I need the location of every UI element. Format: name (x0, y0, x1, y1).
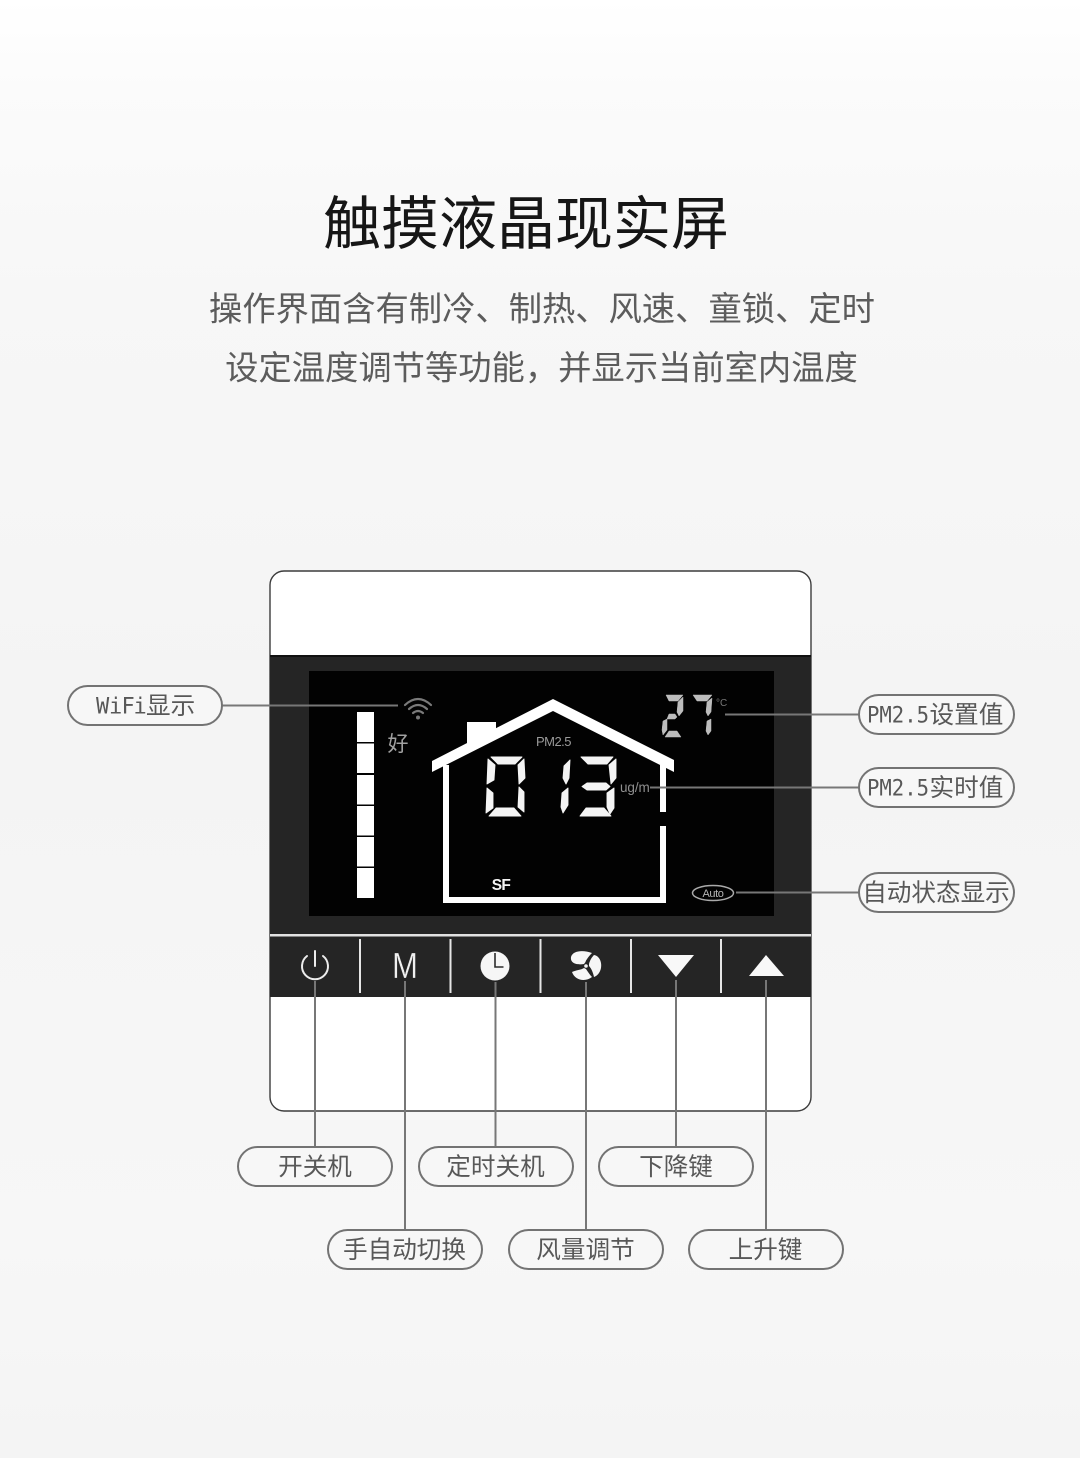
leader line: mode (404, 981, 406, 1230)
callout: timer off (419, 1147, 573, 1186)
callout: fan speed (509, 1230, 663, 1269)
leader line: fan (585, 982, 587, 1230)
icon: fan (571, 951, 601, 980)
callout: up key (689, 1230, 843, 1269)
subtitle text block: 操作界面含有制冷、制热、风速、童锁、定时 (209, 292, 875, 328)
PM2.5 caption: PM2.5 (536, 734, 571, 749)
icon: timer clock (480, 952, 510, 980)
leader line: timer (494, 982, 496, 1147)
icon: house outline (432, 699, 674, 903)
icon: up arrow (749, 955, 784, 976)
panel: LCD screen (309, 671, 774, 916)
leader line: down (675, 980, 677, 1147)
dark control band (270, 656, 811, 997)
icon: down arrow (658, 955, 694, 977)
callout: down key: 下降键 (639, 1147, 713, 1183)
callout: fan speed: 风量调节 (536, 1230, 635, 1266)
air quality word: 好 (388, 733, 408, 756)
callout: up key: 上升键 (729, 1230, 802, 1266)
callout: power: 开关机 (278, 1147, 352, 1183)
callout: WiFi display: 显示 (146, 686, 195, 722)
Auto badge (692, 886, 734, 900)
leader line: auto state (736, 892, 859, 894)
air quality level bar (357, 712, 374, 898)
device white body (270, 571, 811, 1111)
leader line: power (314, 981, 316, 1147)
callout: power (238, 1147, 392, 1186)
subtitle text block (209, 292, 875, 388)
callout: auto state display: 自动状态显示 (862, 873, 1010, 909)
leader line: WiFi (222, 704, 398, 706)
degree unit: °C (716, 698, 727, 709)
callout: WiFi display (68, 686, 222, 725)
leader line: PM2.5 live value (650, 786, 859, 788)
SF label: SF (492, 877, 510, 894)
icon: M mode: M (392, 945, 418, 986)
leader line: up (765, 980, 767, 1230)
callout: PM2.5 set value: 设置值 (930, 695, 1003, 731)
digital set value 27 (662, 695, 712, 737)
callout: PM2.5 live value: PM2.5 (867, 776, 929, 802)
callout: timer off: 定时关机 (446, 1147, 545, 1183)
screen background (309, 671, 774, 916)
callout: manual auto switch: 手自动切换 (343, 1230, 466, 1266)
callout: PM2.5 set value: PM2.5 (867, 704, 929, 728)
icon: power (302, 951, 328, 979)
callout: PM2.5 set value (859, 695, 1014, 734)
callout: WiFi display: WiFi (96, 694, 147, 720)
leader line: PM2.5 set value (725, 714, 859, 716)
button dividers group (359, 939, 722, 993)
callout: down key (599, 1147, 753, 1186)
callout: PM2.5 live value (859, 768, 1014, 807)
unit ug/m3: ug/m (620, 780, 650, 795)
callout: PM2.5 live value: 实时值 (930, 768, 1003, 804)
subtitle text block: 设定温度调节等功能，并显示当前室内温度 (225, 350, 858, 388)
title: 触摸液晶现实屏 (323, 192, 729, 257)
digital reading 013 (486, 757, 616, 816)
icon: wifi (405, 699, 431, 720)
panel: thermostat device (270, 571, 811, 1111)
Auto badge: Auto (702, 888, 724, 900)
button strip divider (270, 934, 811, 936)
